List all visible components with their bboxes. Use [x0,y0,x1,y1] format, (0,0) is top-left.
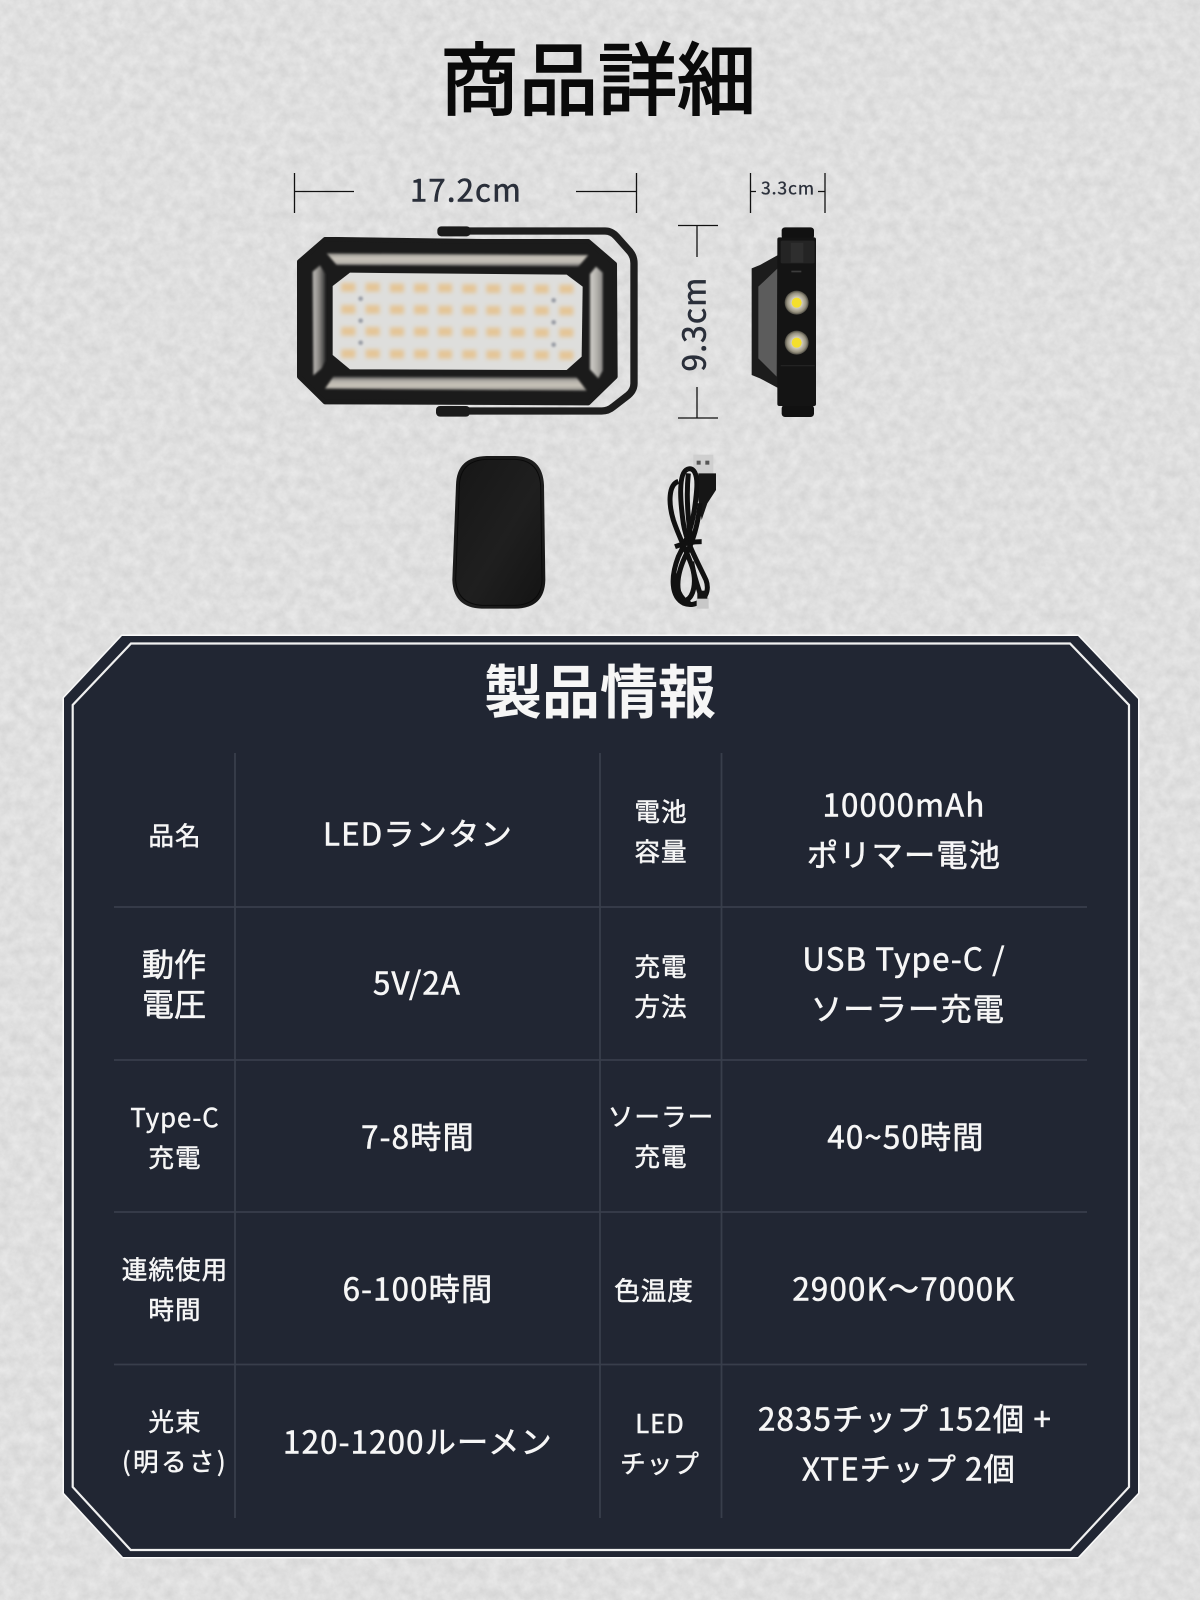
panel: product information: 7-8時間 [361,1112,475,1157]
panel heading: 製品情報 [484,646,716,730]
dimension label: width 17.2cm: 17.2cm [410,166,522,210]
row 3: solar charging [608,1097,985,1174]
lantern body [299,239,615,403]
panel: product information: 電池 [634,792,688,829]
panel: product information: 充電 [148,1138,202,1175]
row 1: product name [148,809,513,854]
panel: product information: 品名 [148,816,202,853]
row 5: luminous flux [122,1402,553,1479]
panel: product information: 2835チップ 152個 + [758,1394,1052,1439]
lantern handle [436,226,634,417]
panel: product information: 充電 [634,947,688,984]
lantern front view [299,226,634,417]
panel: product information: 40~50時間 [827,1112,985,1157]
row 2: charging method [634,934,1006,1029]
side LED lamps [785,291,809,355]
panel: product information: ソーラー充電 [811,984,1005,1029]
dimension label: height 9.3cm: 9.3cm [669,277,715,371]
row 3: Type-C charging [130,1098,475,1175]
panel: product information: 6-100時間 [343,1264,493,1309]
title: 商品詳細 [440,16,756,132]
panel: product information: 容量 [634,832,688,869]
row 4: colour temperature [614,1264,1016,1309]
table grid [114,753,1087,1518]
panel: product information: ポリマー電池 [807,830,1001,875]
panel: product information: 電圧 [142,980,206,1026]
panel: product information: 120-1200ルーメン [283,1417,553,1462]
panel: product information: チップ [620,1444,700,1481]
USB cable [670,455,716,609]
depth dimension lines [750,173,825,213]
panel: product information: 2900K〜7000K [792,1264,1016,1309]
panel: product information: XTEチップ 2個 [802,1444,1016,1489]
height dimension lines [678,226,718,418]
panel: product information: 光束 [148,1402,202,1439]
panel: product information: ソーラー [608,1097,714,1134]
panel: product information: LED [635,1404,685,1441]
dimension label: depth 3.3cm: 3.3cm [761,175,815,200]
row 1: battery capacity [634,780,1001,875]
product illustrations [294,173,826,609]
row 5: LED chips [620,1394,1052,1489]
lantern side light strips [313,253,603,391]
storage pouch [452,456,545,609]
lantern side view [752,227,816,417]
panel: product information: (明るさ) [122,1442,228,1479]
panel: product information: 時間 [148,1290,202,1327]
row 2: operating voltage [142,940,461,1026]
lantern main LED panel [333,273,583,370]
panel: product information: 5V/2A [373,958,461,1003]
panel: product information: USB Type-C / [802,934,1006,979]
panel: product information: 充電 [634,1137,688,1174]
panel: product information: 方法 [634,987,688,1024]
panel: product information: LEDランタン [323,809,513,854]
panel: product information: 動作 [142,940,206,986]
panel: product information: Type-C [130,1098,220,1135]
panel: product information: 10000mAh [823,780,985,825]
row 4: continuous use time [122,1250,493,1327]
width dimension lines [294,173,636,213]
panel: product information: 連続使用 [122,1250,228,1287]
panel: product information: 色温度 [614,1271,694,1308]
